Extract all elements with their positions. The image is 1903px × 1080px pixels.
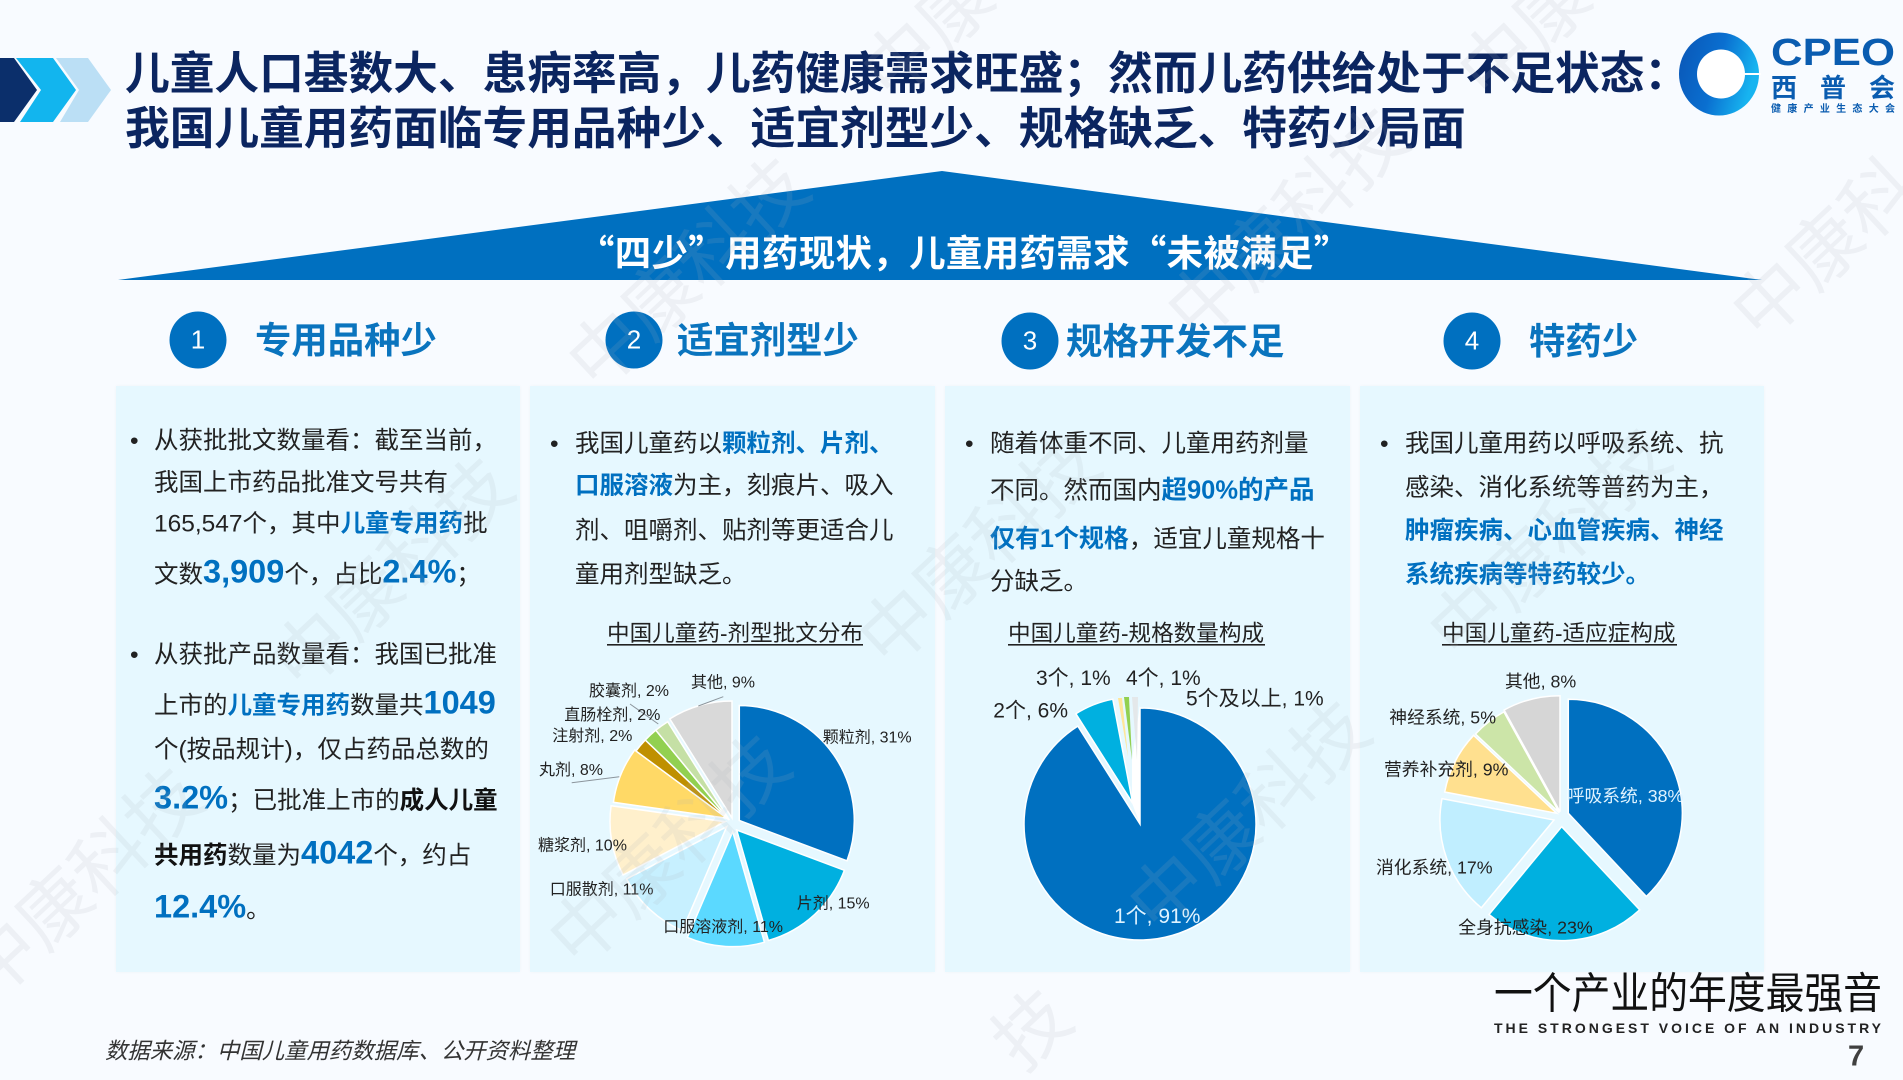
panel: 规格开发不足 bbox=[945, 386, 1350, 972]
text block: 童用剂型缺乏。 bbox=[575, 561, 746, 588]
pie chart: 规格数量构成 bbox=[993, 621, 1324, 941]
pie chart: 适应症构成: 呼吸系统, 38% bbox=[1567, 786, 1683, 806]
pie chart: 适应症构成: 神经系统, 5% bbox=[1389, 707, 1496, 727]
pie chart: 适应症构成: 营养补充剂, 9% bbox=[1384, 759, 1509, 779]
pie chart: 剂型批文分布: 口服散剂, 11% bbox=[550, 880, 653, 898]
watermark: 中康科技 bbox=[843, 420, 1116, 682]
text block: 随着体重不同、儿童用药剂量 bbox=[990, 430, 1308, 457]
text block: 分缺乏。 bbox=[990, 568, 1088, 595]
pie chart: 规格数量构成: 1个, 91% bbox=[1114, 905, 1200, 928]
bullet 2 text block: 从获批产品数量看：我国已批准 bbox=[154, 641, 497, 668]
footer slogan bbox=[1494, 970, 1882, 1036]
number badge 4: 4 bbox=[1465, 326, 1479, 356]
text block bbox=[1380, 430, 1724, 588]
number badge 3: 3 bbox=[1023, 326, 1037, 356]
column heading 4: 特药少 bbox=[1529, 313, 1638, 365]
column heading 1: 专用品种少 bbox=[255, 312, 437, 364]
text block: 仅有1个规格，适宜儿童规格十 bbox=[990, 525, 1325, 553]
bullet 1 text block: 我国上市药品批准文号共有 bbox=[154, 469, 448, 496]
bullet 2 text block: 上市的儿童专用药数量共1049 bbox=[154, 684, 496, 720]
pie chart: 剂型批文分布: 颗粒剂, 31% bbox=[823, 728, 912, 746]
banner triangle bbox=[118, 171, 1762, 280]
bullet 1 text block bbox=[130, 427, 497, 590]
pie chart: 规格数量构成: 中国儿童药-规格数量构成 bbox=[1008, 621, 1264, 646]
text block: 剂、咀嚼剂、贴剂等更适合儿 bbox=[575, 517, 894, 544]
pie chart: 剂型批文分布: 片剂, 15% bbox=[797, 894, 870, 912]
bullet 2 text block: 共用药数量为4042个，约占 bbox=[154, 834, 471, 870]
logo: CPEO 西普会: 健康产业生态大会 bbox=[1771, 102, 1895, 115]
pie chart: 剂型批文分布 bbox=[538, 621, 912, 948]
text block: 肿瘤疾病、心血管疾病、神经 bbox=[1405, 517, 1724, 544]
watermark: 中康科技 bbox=[256, 443, 529, 705]
text block: 我国儿童用药以呼吸系统、抗 bbox=[1405, 430, 1724, 457]
text block: 系统疾病等特药较少。 bbox=[1405, 561, 1650, 588]
pie chart: 适应症构成: 其他, 8% bbox=[1505, 672, 1576, 692]
bullet 1 text block: • bbox=[130, 427, 139, 454]
bullet 2 text block bbox=[130, 641, 498, 924]
watermark: 中康科技 bbox=[552, 143, 825, 405]
bullet 2 text block: 个(按品规计)，仅占药品总数的 bbox=[154, 736, 489, 763]
text block: 口服溶液为主，刻痕片、吸入 bbox=[575, 472, 894, 499]
banner heading: “四少”用药现状，儿童用药需求“未被满足” bbox=[578, 225, 1351, 277]
pie chart: 适应症构成: 消化系统, 17% bbox=[1376, 858, 1493, 878]
panel: 专用品种少 bbox=[116, 386, 520, 972]
pie chart: 规格数量构成: 3个, 1% bbox=[1036, 667, 1111, 690]
number badge 1 bbox=[170, 312, 226, 368]
number badge 1: 1 bbox=[191, 324, 205, 354]
column heading 2: 适宜剂型少 bbox=[677, 312, 859, 364]
title: 儿童人口基数大、患病率高，儿药健康需求旺盛；然而儿药供给处于不足状态： bbox=[125, 37, 1689, 102]
watermark: 中康科技 bbox=[1113, 686, 1386, 948]
pie chart: 规格数量构成: 4个, 1% bbox=[1126, 667, 1201, 690]
text block: 不同。然而国内超90%的产品 bbox=[990, 477, 1315, 505]
logo: CPEO 西普会: CPEO bbox=[1771, 32, 1895, 74]
number badge 4 bbox=[1444, 312, 1500, 370]
watermark: 中康科技 bbox=[1151, 93, 1424, 355]
watermark: 中康科技 bbox=[533, 720, 806, 982]
pie chart: 剂型批文分布: 丸剂, 8% bbox=[539, 761, 603, 779]
pie chart: 剂型批文分布: 胶囊剂, 2% bbox=[589, 682, 669, 700]
pie chart: 剂型批文分布: 糖浆剂, 10% bbox=[538, 836, 627, 854]
bullet 1 text block: 文数3,909个，占比2.4%； bbox=[154, 554, 481, 590]
pie chart: 规格数量构成: 5个及以上, 1% bbox=[1186, 688, 1324, 710]
logo: CPEO 西普会 bbox=[1679, 32, 1895, 116]
bullet 2 text block: 3.2%；已批准上市的成人儿童 bbox=[154, 780, 498, 816]
page number: 7 bbox=[1848, 1041, 1864, 1073]
pie chart: 适应症构成: 全身抗感染, 23% bbox=[1458, 918, 1593, 938]
text block: • bbox=[1380, 430, 1389, 457]
text block bbox=[965, 430, 1325, 595]
number badge 2: 2 bbox=[627, 324, 641, 354]
pie chart: 适应症构成 bbox=[1376, 621, 1683, 942]
title: 我国儿童用药面临专用品种少、适宜剂型少、规格缺乏、特药少局面 bbox=[125, 92, 1466, 157]
text block: 感染、消化系统等普药为主， bbox=[1405, 474, 1724, 501]
bullet 1 text block: 从获批批文数量看：截至当前， bbox=[154, 427, 497, 454]
icon: header chevrons bbox=[0, 58, 111, 122]
text block: 我国儿童药以颗粒剂、片剂、 bbox=[575, 430, 894, 457]
title bbox=[125, 37, 1689, 157]
text block: • bbox=[550, 430, 559, 457]
watermark: 中康科技 bbox=[1413, 413, 1686, 675]
logo: CPEO 西普会: 西普会 bbox=[1771, 73, 1895, 103]
pie chart: 剂型批文分布: 其他, 9% bbox=[691, 674, 755, 692]
data source note: 数据来源：中国儿童用药数据库、公开资料整理 bbox=[105, 1039, 575, 1064]
pie chart: 剂型批文分布: 直肠栓剂, 2% bbox=[564, 706, 660, 724]
pie chart: 剂型批文分布: 中国儿童药-剂型批文分布 bbox=[607, 621, 863, 646]
bullet 2 text block: • bbox=[130, 641, 139, 668]
column heading 3: 规格开发不足 bbox=[1066, 313, 1284, 365]
panel: 适宜剂型少 bbox=[530, 386, 935, 972]
pie chart: 适应症构成: 中国儿童药-适应症构成 bbox=[1442, 621, 1675, 646]
number badge 2 bbox=[606, 312, 662, 368]
slogan English: THE STRONGEST VOICE OF AN INDUSTRY bbox=[1494, 1020, 1882, 1036]
slogan Chinese: 一个产业的年度最强音 bbox=[1494, 970, 1882, 1019]
bullet 2 text block: 12.4%。 bbox=[154, 888, 271, 924]
pie chart: 剂型批文分布: 口服溶液剂, 11% bbox=[663, 918, 783, 936]
bullet 1 text block: 165,547个，其中儿童专用药批 bbox=[154, 510, 488, 537]
text block: • bbox=[965, 430, 974, 457]
panel: 特药少 bbox=[1360, 386, 1764, 972]
text block bbox=[550, 430, 894, 588]
pie chart: 剂型批文分布: 注射剂, 2% bbox=[552, 727, 632, 745]
pie chart: 规格数量构成: 2个, 6% bbox=[993, 700, 1068, 722]
number badge 3 bbox=[1002, 312, 1058, 370]
